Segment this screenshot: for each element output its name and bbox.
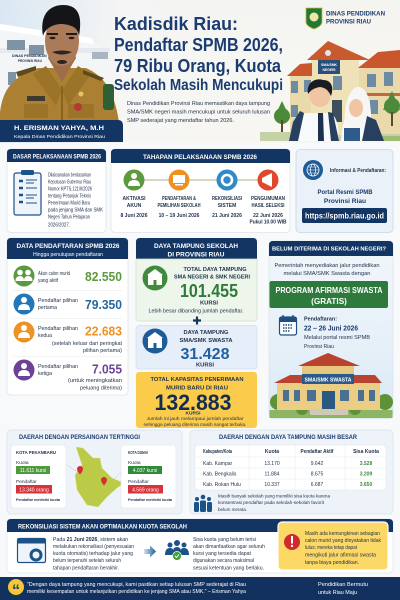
text: pemanfaatan kuota: kursi yang tersedia dapat — [193, 551, 252, 557]
row: pendaftar pilihan pertama: pertama — [38, 305, 57, 311]
panel: informasi & pendaftaran: Informasi & Pendaftaran: — [330, 168, 386, 174]
icon: globe — [303, 160, 323, 180]
panel: belum diterima: Pemerintah menyediakan jalur pendidikan — [274, 263, 380, 269]
card: Kota Dumai: 4.569 orang — [132, 488, 159, 494]
text: proses rekonsiliasi: tahapan pendaftaran berakhir. — [53, 566, 119, 572]
logo: Dinas Pendidikan Provinsi Riau: PROVINSI RIAU — [326, 20, 371, 26]
heading: dasar pelaksanaan: DASAR PELAKSANAAN SPMB 2026 — [13, 154, 102, 160]
table: Kab. Rokan Hulu — [203, 482, 241, 488]
icon: quote: “ — [12, 582, 20, 600]
step 1: aktivasi akun — [121, 170, 148, 219]
panel: daya tampung masih besar — [190, 430, 393, 514]
table: 13.170 — [264, 461, 280, 467]
panel: belum diterima — [269, 241, 393, 418]
title: Sekolah Masih Mencukupi — [114, 77, 283, 94]
step 2: pendaftaran: 10 – 19 Juni 2026 — [159, 213, 200, 219]
card: sekolah swasta: KURSI — [196, 362, 214, 368]
office building behind portrait: DINAS PENDIDIKAN — [12, 54, 47, 58]
card: Kota Dumai — [121, 445, 176, 508]
note — [218, 494, 330, 513]
title: Pendaftar SPMB 2026, — [114, 35, 283, 55]
step 3: rekonsiliasi: 21 Juni 2026 — [212, 213, 242, 219]
logo: Dinas Pendidikan Provinsi Riau — [306, 8, 385, 29]
illustration: SMA/SMK Negeri school and students: NEGERI — [322, 68, 336, 72]
card: Kota Pekanbaru — [11, 445, 66, 508]
table: Sisa Kuota — [353, 449, 379, 455]
panel: belum diterima: Melalui portal resmi SPMB — [304, 335, 371, 341]
text: dasar pelaksanaan: Nomor KPTS.121/II/2026 — [48, 186, 92, 192]
table: 8.675 — [311, 472, 323, 478]
plus sign — [193, 316, 201, 324]
step 2: pendaftaran: PENDAFTARAN & — [162, 196, 196, 202]
icon: quote — [8, 579, 24, 600]
card: total kapasitas: sehingga peluang diterima masih sangat terbuka. — [144, 422, 246, 428]
table — [195, 445, 386, 490]
step 4: pengumuman: Pukul 10.00 WIB — [250, 220, 287, 226]
callout: afirmasi swasta: Masih ada kemungkinan sebagian — [305, 531, 380, 537]
row: akun calon murid: 82.550 — [85, 269, 122, 284]
step 3: rekonsiliasi — [212, 170, 243, 219]
card: total kapasitas: MURID BARU DI RIAU — [166, 386, 228, 392]
card: sekolah swasta: 31.428 — [180, 346, 230, 363]
heading: rekonsiliasi: REKONSILIASI SISTEM AKAN OPTIMALKAN KUOTA SEKOLAH — [18, 524, 187, 530]
panel: belum diterima: Provinsi Riau — [304, 344, 334, 350]
icon: school green — [142, 266, 168, 290]
card: sekolah swasta: SMA/SMK SWASTA — [180, 338, 233, 344]
text: pemanfaatan kuota — [193, 537, 265, 572]
row: pendaftar pilihan ketiga: peluang diterima) — [80, 386, 122, 392]
step 4: pengumuman: PENGUMUMAN — [251, 196, 285, 202]
intro text: SMP sederajat yang mendaftar tahun 2026. — [127, 118, 234, 124]
row: pendaftar pilihan ketiga: ketiga — [38, 371, 52, 377]
row: akun calon murid: Akun calon murid — [38, 271, 70, 277]
card: sekolah negeri: Lebih besar dibanding jumlah pendaftar. — [148, 308, 244, 314]
table: 10.337 — [264, 482, 280, 488]
arrow — [144, 546, 156, 558]
text: proses rekonsiliasi: kuota otomatis) terhadap jalur yang — [53, 551, 133, 557]
row: pendaftar pilihan pertama — [14, 294, 122, 314]
callout: afirmasi swasta — [278, 522, 388, 570]
panel: daya tampung heading: DAYA TAMPUNG SEKOLAH — [154, 243, 238, 250]
card: total kapasitas — [136, 372, 257, 428]
url button: https://spmb.riau.go.id — [305, 212, 384, 220]
panel: belum diterima: melalui SMA/SMK Swasta dengan — [284, 271, 371, 277]
tagline — [318, 582, 368, 596]
card: total kapasitas: KURSI — [186, 410, 201, 416]
program banner: PROGRAM AFIRMASI SWASTA — [276, 286, 383, 295]
card: sekolah negeri: 101.455 — [180, 281, 238, 301]
icon: clipboard — [14, 170, 41, 215]
panel: daerah persaingan tertinggi — [7, 430, 182, 514]
row: pendaftar pilihan ketiga: 7.055 — [92, 362, 122, 376]
panel: daya tampung heading: DI PROVINSI RIAU — [168, 252, 225, 258]
card: sekolah negeri: TOTAL DAYA TAMPUNG — [184, 267, 247, 273]
card: Kota Pekanbaru: Pendaftar — [16, 479, 37, 485]
heading: daya tampung besar: DAERAH DENGAN DAYA TAMPUNG MASIH BESAR — [219, 434, 357, 441]
note: belum merata. — [218, 507, 247, 513]
panel: belum diterima: Pendaftaran: — [304, 316, 337, 322]
office building behind portrait: PROVINSI RIAU — [18, 59, 43, 63]
quote — [27, 582, 246, 595]
text: proses rekonsiliasi: melakukan rekonsiliasi (penyesuaian — [53, 544, 134, 550]
illustration: SMA/SMK Negeri school and students — [260, 41, 400, 141]
text: dasar pelaksanaan — [48, 172, 104, 228]
step 2: pendaftaran — [158, 170, 201, 219]
row: akun calon murid — [14, 266, 122, 286]
icon: school blue — [142, 328, 168, 354]
table: 6.687 — [311, 482, 323, 488]
intro text: Dinas Pendidikan Provinsi Riau memastikan daya tampung — [127, 101, 270, 107]
panel: informasi & pendaftaran: Provinsi Riau — [324, 198, 366, 205]
row: pendaftar pilihan kedua: Pendaftar pilihan — [38, 326, 78, 332]
callout: afirmasi swasta: mengikuti jalur afirmasi swasta — [305, 552, 376, 558]
office building behind portrait — [0, 24, 110, 120]
card: Kota Dumai: 4.037 kursi — [133, 468, 157, 474]
table: Kuota — [265, 449, 279, 455]
row: pendaftar pilihan ketiga — [14, 360, 122, 392]
heading: data pendaftaran: DATA PENDAFTARAN SPMB 2026 — [16, 243, 120, 250]
name plate: Kepala Dinas Pendidikan Provinsi Riau — [14, 134, 105, 140]
step 2: pendaftaran: PEMILIHAN SEKOLAH — [158, 203, 201, 209]
callout: afirmasi swasta: lulus; mereka tetap dapat — [305, 545, 357, 551]
card: Kota Pekanbaru: 13.340 orang — [19, 488, 49, 494]
row: pendaftar pilihan kedua — [14, 322, 123, 354]
card: total kapasitas: TOTAL KAPASITAS PENERIMAAN — [150, 377, 244, 383]
row: pendaftar pilihan ketiga: Pendaftar pilihan — [38, 364, 78, 370]
panel: belum diterima: 22 – 26 Juni 2026 — [304, 324, 358, 332]
table: Kab. Kampar — [203, 461, 233, 467]
step 4: pengumuman: HASIL SELEKSI — [252, 203, 285, 209]
title: Kadisdik Riau: — [114, 14, 238, 34]
step 4: pengumuman — [250, 170, 287, 226]
illustration: SMA/SMK Swasta school — [270, 353, 393, 418]
table: Pendaftar Aktif — [300, 449, 334, 455]
illustration: SMA/SMK Negeri school and students: SMA/SMK — [321, 63, 338, 67]
panel: daya tampung heading — [136, 238, 257, 259]
tagline: untuk Riau Maju — [318, 590, 357, 596]
panel: dasar pelaksanaan — [7, 149, 106, 232]
step 1: aktivasi akun: AKUN — [127, 203, 142, 209]
callout: afirmasi swasta: tanpa biaya pendidikan. — [305, 560, 359, 566]
panel: data pendaftaran — [7, 238, 128, 395]
card: Kota Dumai: Pendaftar — [128, 479, 149, 485]
table: Kabupaten/Kota — [203, 449, 232, 455]
row: pendaftar pilihan ketiga: (untuk meningkatkan — [68, 378, 122, 384]
map of Riau — [58, 447, 128, 507]
card: Kota Dumai: Kuota — [128, 460, 141, 466]
card: Kota Pekanbaru: Pendaftar melebihi kuota — [16, 498, 61, 502]
panel: data pendaftaran: Hingga penutupan pendaftaran — [33, 252, 103, 258]
card: sekolah negeri: SMA NEGERI & SMK NEGERI — [174, 274, 250, 280]
text: dasar pelaksanaan: tentang Petunjuk Teknis — [48, 194, 91, 200]
logo: Dinas Pendidikan Provinsi Riau: DINAS PENDIDIKAN — [326, 12, 385, 18]
row: pendaftar pilihan kedua: kedua — [38, 333, 52, 339]
intro text: SMA/SMK negeri masih mencukupi untuk seluruh lulusan — [127, 110, 270, 116]
card: sekolah swasta: DAYA TAMPUNG — [184, 330, 229, 336]
portrait: H. Erisman Yahya — [0, 5, 119, 124]
note: Masih banyak sekolah yang memiliki sisa kuota karena — [218, 494, 330, 500]
text: pemanfaatan kuota: digunakan secara maksimal — [193, 558, 254, 564]
icon: calendar — [280, 315, 296, 335]
row: pendaftar pilihan pertama: Pendaftar pilihan — [38, 298, 78, 304]
card: Kota Dumai: KOTA DUMAI — [128, 450, 148, 456]
card: sekolah negeri — [136, 259, 257, 321]
icon: people with check — [165, 540, 189, 560]
card: Kota Pekanbaru: Kuota — [16, 460, 29, 466]
panel: rekonsiliasi sistem — [7, 519, 393, 573]
illustration: SMA/SMK Swasta school: SMA/SMK SWASTA — [304, 378, 352, 384]
callout: afirmasi swasta: calon murid yang dinyatakan tidak — [305, 538, 381, 544]
row: pendaftar pilihan kedua: 22.683 — [85, 324, 122, 338]
icon: people — [194, 495, 212, 512]
text: dasar pelaksanaan: 2026/2027. — [48, 222, 70, 228]
text: pemanfaatan kuota: Sisa kuota yang belum terisi — [193, 537, 256, 543]
panel: informasi & pendaftaran — [296, 150, 393, 232]
text: pemanfaatan kuota: sesuai ketentuan yang berlaku. — [193, 566, 264, 572]
panel: tahapan pelaksanaan — [111, 149, 290, 232]
text: dasar pelaksanaan: pada jenjang SMA dan SMK — [48, 208, 104, 214]
row: pendaftar pilihan kedua: pilihan pertama) — [83, 348, 122, 354]
text: dasar pelaksanaan: Negeri Tahun Pelajaran — [48, 214, 90, 220]
heading: tahapan pelaksanaan: TAHAPAN PELAKSANAAN SPMB 2026 — [143, 154, 257, 161]
step 3: rekonsiliasi: SISTEM — [218, 203, 236, 209]
text: pemanfaatan kuota: akan dimanfaatkan agar seluruh — [193, 544, 265, 550]
title: 79 Ribu Orang, Kuota — [114, 56, 282, 76]
text: proses rekonsiliasi — [53, 537, 134, 572]
note: konsentrasi pendaftar pada sekolah-sekolah favorit — [218, 500, 325, 506]
table: Kab. Bengkalis — [203, 472, 237, 478]
heading: persaingan: DAERAH DENGAN PERSAINGAN TERTINGGI — [19, 434, 140, 441]
panel: informasi & pendaftaran: Portal Resmi SPMB — [318, 189, 373, 196]
card: Kota Pekanbaru: 11.611 kursi — [20, 468, 46, 474]
step 1: aktivasi akun: 8 Juni 2026 — [121, 213, 148, 219]
icon: window with gear — [18, 538, 46, 562]
card: Kota Pekanbaru: KOTA PEKANBARU — [16, 450, 56, 456]
quote: memiliki kesempatan untuk melanjutkan pendidikan ke jenjang SMA atau SMK." – Erisman Yahya — [27, 589, 246, 595]
card: sekolah swasta — [136, 326, 257, 369]
program banner: (GRATIS) — [311, 297, 347, 306]
table: 3.209 — [360, 472, 372, 478]
text: dasar pelaksanaan: Dilaksanakan berdasarkan — [48, 172, 91, 178]
card: Kota Dumai: Pendaftar melebihi kuota — [128, 498, 173, 502]
row: akun calon murid: yang aktif — [38, 278, 58, 284]
table: 11.884 — [265, 472, 280, 478]
row: pendaftar pilihan pertama: 79.350 — [85, 297, 122, 312]
text: dasar pelaksanaan: Keputusan Gubernur Riau — [48, 180, 91, 186]
table: 9.642 — [311, 461, 323, 467]
card: total kapasitas: 132.883 — [154, 390, 232, 415]
row: pendaftar pilihan kedua: (setelah keluar dari peringkat — [52, 341, 123, 347]
step 3: rekonsiliasi: REKONSILIASI — [212, 196, 243, 202]
program banner — [270, 281, 388, 308]
name plate: H. ERISMAN YAHYA, M.H — [14, 125, 104, 132]
card: total kapasitas: Jumlah ini jauh melampaui jumlah pendaftar — [146, 416, 244, 422]
table: 3.528 — [360, 461, 372, 467]
heading: belum diterima: BELUM DITERIMA DI SEKOLAH NEGERI? — [272, 246, 386, 252]
tagline: Pendidikan Bermutu — [318, 582, 368, 588]
text: dasar pelaksanaan: Penerimaan Murid Baru — [48, 200, 90, 206]
table: 3.650 — [360, 482, 372, 488]
title — [114, 14, 283, 94]
text: proses rekonsiliasi: Pada 21 Juni 2026, sistem akan — [53, 537, 128, 543]
name plate — [0, 120, 123, 142]
card: sekolah negeri: KURSI — [200, 300, 218, 306]
footer — [0, 577, 400, 600]
intro text — [127, 101, 270, 124]
quote: "Dengan daya tampung yang mencukupi, kami pastikan setiap lulusan SMP sederajat di Riau — [27, 582, 246, 588]
step 4: pengumuman: 22 Juni 2026 — [253, 213, 283, 219]
step 1: aktivasi akun: AKTIVASI — [123, 196, 146, 202]
text: proses rekonsiliasi: belum terpenuhi setelah seluruh — [53, 558, 121, 564]
